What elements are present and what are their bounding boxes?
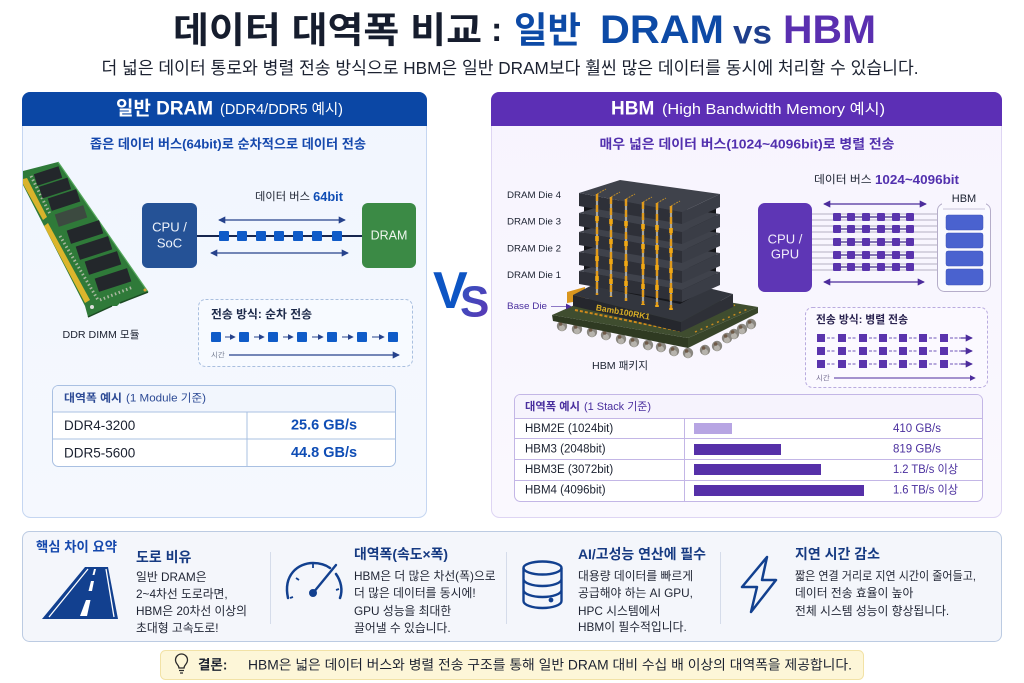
bandwidth table: HBM: (1 Stack 기준) [584, 400, 651, 413]
DIMM caption: DDR DIMM 모듈 [62, 329, 140, 341]
conclusion banner: HBM은 넓은 데이터 버스와 병렬 전송 구조를 통해 일반 DRAM 대비 수십 배 이상의 대역폭을 제공합니다. [248, 658, 852, 672]
row: HBM4 [525, 484, 958, 496]
summary item: road analogy: 2~4차선 도로라면, [136, 587, 228, 601]
bus diagram: parallel [758, 193, 990, 292]
summary item: bandwidth: 더 많은 데이터를 동시에! [354, 586, 476, 600]
summary item: AI HPC: AI/고성능 연산에 필수 [578, 546, 706, 562]
DRAM dies [579, 180, 720, 302]
bandwidth table: DRAM [52, 386, 396, 466]
summary item: AI HPC: 대용량 데이터를 빠르게 [578, 569, 693, 583]
summary item: bandwidth: 끌어낼 수 있습니다. [354, 621, 451, 635]
summary item: road analogy: HBM은 20차선 이상의 [136, 604, 247, 618]
summary item: bandwidth: HBM은 더 많은 차선(폭)으로 [354, 569, 496, 583]
bandwidth table: HBM: 대역폭 예시 [525, 399, 580, 413]
summary heading: 핵심 차이 요약 [36, 540, 117, 554]
row: HBM2E: 410 GB/s [893, 423, 941, 435]
panel header: HBM: (High Bandwidth Memory 예시) [662, 101, 885, 118]
CPU block: CPU / [152, 220, 187, 234]
title: : [491, 11, 502, 49]
bandwidth table: DRAM: DDR4-3200 [64, 418, 135, 433]
summary item: AI HPC: HPC 시스템에서 [578, 604, 660, 618]
row: HBM3: 819 GB/s [893, 444, 941, 456]
transfer method box: parallel: 시간 [816, 372, 830, 382]
transfer method box: serial [198, 300, 412, 366]
HBM package caption: HBM 패키지 [592, 360, 648, 372]
CPU block: GPU [771, 246, 799, 262]
summary item: latency: 데이터 전송 효율이 높아 [795, 586, 914, 600]
title: 데이터 대역폭 비교 [173, 10, 482, 50]
HBM stack illustration [552, 180, 758, 358]
panel: HBM [491, 92, 1002, 518]
die labels: DRAM Die 2 [507, 244, 561, 254]
summary item: bandwidth: 대역폭(속도×폭) [354, 546, 448, 562]
CPU block [758, 203, 812, 292]
die labels: DRAM Die 4 [507, 190, 561, 201]
title [173, 8, 876, 52]
bandwidth table: HBM [514, 394, 982, 502]
panel: key differences summary [22, 532, 1002, 642]
row: HBM3E [525, 463, 958, 476]
row: HBM4: 1.6 TB/s 이상 [893, 484, 958, 496]
bandwidth table: DRAM: (1 Module 기준) [126, 392, 206, 404]
summary item: latency: 짧은 연결 거리로 지연 시간이 줄어들고, [795, 569, 976, 583]
panel header: general DRAM: (DDR4/DDR5 예시) [220, 101, 343, 118]
panel header: HBM [491, 92, 1002, 126]
icon: lightning bolt [742, 557, 776, 612]
die labels: DRAM Die 3 [507, 216, 561, 228]
panel header: general DRAM: 일반 DRAM [116, 98, 213, 120]
summary item: AI HPC [578, 546, 706, 634]
icon: road [42, 567, 118, 619]
subtitle: 더 넓은 데이터 통로와 병렬 전송 방식으로 HBM은 일반 DRAM보다 훨씬 많은 데이터를 동시에 처리할 수 있습니다. [102, 58, 918, 78]
bandwidth table: DRAM: 44.8 GB/s [291, 445, 357, 461]
summary item: latency [795, 546, 976, 618]
die labels [507, 190, 561, 281]
DRAM block [362, 203, 416, 268]
summary item: road analogy [136, 549, 247, 635]
HBM block [938, 193, 990, 292]
base die label: Base Die [507, 301, 547, 312]
TSV columns [597, 189, 680, 310]
conclusion banner: 결론: [198, 658, 227, 672]
row: HBM3E: HBM3E (3072bit) [525, 464, 613, 476]
panel subheading: 좁은 데이터 버스(64bit)로 순차적으로 데이터 전송 [90, 136, 366, 152]
base die label [507, 301, 571, 312]
VS mark: V [433, 262, 468, 320]
bus label: 데이터 버스 1024~4096bit [814, 173, 960, 187]
HBM block: HBM [952, 193, 976, 205]
summary item: AI HPC: 공급해야 하는 AI GPU, [578, 586, 693, 600]
conclusion banner [160, 650, 864, 680]
row: HBM3: HBM3 (2048bit) [525, 444, 606, 456]
summary item: bandwidth: GPU 성능을 최대한 [354, 604, 451, 618]
transfer method box: serial: 전송 방식: 순차 전송 [211, 308, 312, 321]
bus label: 데이터 버스 64bit [255, 190, 344, 204]
DIMM module illustration [23, 162, 148, 317]
VS mark [433, 262, 489, 326]
DRAM block: DRAM [371, 228, 407, 242]
summary item: latency: 전체 시스템 성능이 향상됩니다. [795, 604, 949, 618]
row: HBM3 [525, 444, 941, 456]
bus diagram: serial [142, 203, 416, 268]
CPU block: CPU / [768, 232, 803, 246]
summary item: road analogy: 도로 비유 [136, 549, 192, 565]
title: HBM [783, 8, 876, 52]
summary item: AI HPC: HBM이 필수적입니다. [578, 620, 687, 634]
transfer method box: parallel [806, 308, 988, 388]
title: DRAM [600, 8, 724, 52]
VS mark: S [460, 278, 489, 326]
row: HBM4: HBM4 (4096bit) [525, 484, 606, 496]
base die [567, 287, 585, 303]
icon: speed gauge [287, 563, 341, 598]
balls [557, 319, 756, 358]
bandwidth table: DRAM: 대역폭 예시 [64, 390, 122, 404]
panel: general DRAM [22, 92, 427, 518]
CPU block [142, 203, 197, 268]
transfer method box: serial: 시간 [211, 350, 225, 360]
substrate [552, 315, 688, 348]
transfer method box: parallel: 전송 방식: 병렬 전송 [816, 312, 908, 326]
icon: light bulb [176, 654, 188, 673]
die labels: DRAM Die 1 [507, 270, 561, 281]
icon: database [524, 562, 562, 608]
summary item: road analogy: 일반 DRAM은 [136, 570, 207, 584]
bandwidth table: DRAM: DDR5-5600 [64, 446, 135, 460]
panel header: general DRAM [22, 92, 427, 126]
summary item: road analogy: 초대형 고속도로! [136, 621, 219, 635]
row: HBM2E [525, 423, 941, 435]
panel subheading: 매우 넓은 데이터 버스(1024~4096bit)로 병렬 전송 [600, 136, 895, 152]
summary item: latency: 지연 시간 감소 [795, 546, 880, 562]
stack core [584, 196, 716, 304]
row: HBM3E: 1.2 TB/s 이상 [893, 463, 958, 476]
HBM stack illustration: Bamb100RK1 [595, 302, 651, 322]
title: 일반 [514, 10, 581, 50]
title: vs [733, 14, 772, 50]
bandwidth table: DRAM: 25.6 GB/s [291, 418, 357, 434]
summary item: bandwidth [354, 546, 496, 635]
CPU block: SoC [157, 236, 182, 250]
panel header: HBM: HBM [611, 98, 654, 120]
row: HBM2E: HBM2E (1024bit) [525, 423, 613, 435]
